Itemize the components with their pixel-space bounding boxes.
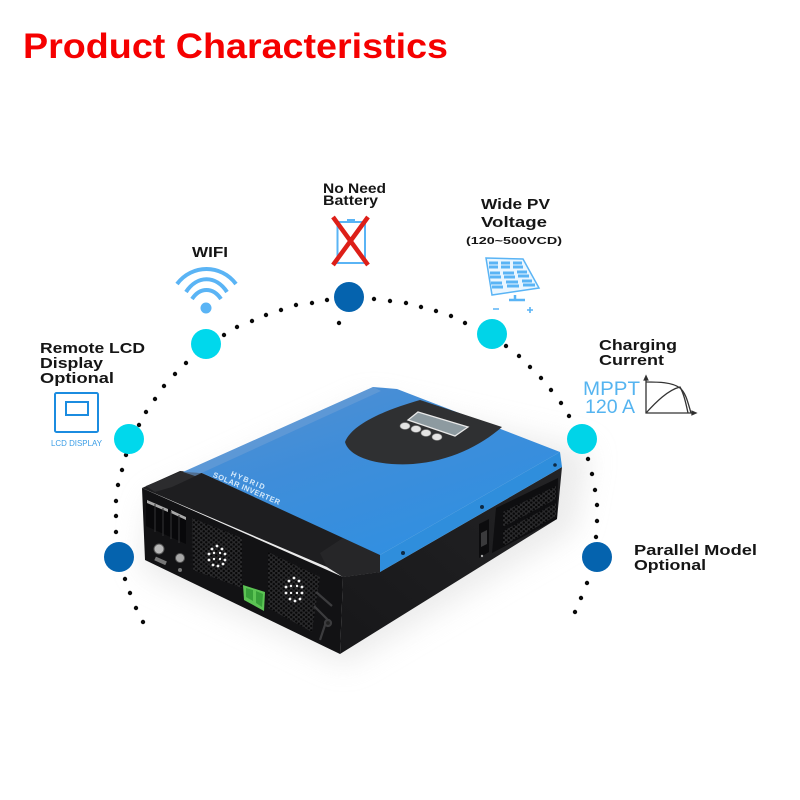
MPPT 120A text [583, 379, 640, 418]
icon: crossed battery [333, 217, 368, 265]
LCD screen [408, 412, 468, 436]
cap chamfer highlight [146, 472, 200, 492]
label: charging current [599, 337, 677, 369]
label: charging current: Charging [599, 337, 677, 354]
node: remote LCD [114, 424, 144, 454]
label: remote LCD [40, 340, 145, 387]
label: remote LCD: Display [40, 355, 104, 372]
right fan grille [268, 552, 320, 632]
MPPT 120A text: MPPT [583, 379, 640, 400]
label: wide PV voltage: Wide PV [481, 196, 550, 213]
node: wifi [191, 329, 221, 359]
right side of case [340, 467, 562, 654]
icon: solar panel [486, 258, 539, 313]
label: remote LCD: Optional [40, 370, 114, 387]
black end cap [142, 471, 380, 577]
icon: LCD display: LCD DISPLAY [51, 438, 102, 448]
blue lid [183, 387, 560, 555]
left fan grille [192, 518, 242, 588]
side vent [492, 478, 558, 553]
brand text: HYBRID [230, 469, 267, 492]
breaker terminals [146, 500, 186, 544]
front face [142, 488, 343, 654]
control panel [345, 400, 502, 464]
output terminals [314, 592, 332, 640]
label: wifi: WIFI [192, 244, 228, 261]
power switch [479, 519, 489, 558]
MPPT 120A text: 120 A [585, 397, 635, 418]
front knobs [154, 544, 184, 572]
label: parallel model: Optional [634, 557, 706, 574]
node: charging current [567, 424, 597, 454]
dotted arc [114, 297, 599, 624]
icon: wifi [177, 269, 236, 314]
panel buttons [400, 423, 442, 440]
soft shadow behind inverter [140, 400, 590, 665]
left fan hub [208, 545, 226, 567]
green connector [243, 585, 265, 611]
lid screws [401, 463, 557, 555]
right fan hub [285, 577, 303, 602]
lid stripe [183, 387, 381, 476]
label: remote LCD: Remote LCD [40, 340, 145, 357]
node: parallel model right [582, 542, 612, 572]
node: parallel model [104, 542, 134, 572]
label: wide PV voltage [466, 196, 562, 247]
icon: LCD display [51, 393, 102, 448]
brand text: SOLAR INVERTER [212, 470, 282, 507]
node: PV voltage [477, 319, 507, 349]
label: parallel model: Parallel Model [634, 542, 757, 559]
label: charging current: Current [599, 352, 664, 369]
label: wide PV voltage: (120~500VCD) [466, 236, 562, 247]
node: no battery [334, 282, 364, 312]
lid front fold [380, 452, 562, 572]
label: no need battery [323, 180, 386, 208]
chart: MPPT curve [644, 376, 696, 415]
title: Product Characteristics [23, 27, 448, 66]
label: parallel model [634, 542, 757, 574]
label: wide PV voltage: Voltage [481, 214, 547, 231]
label: no need battery: No Need [323, 180, 386, 196]
inverter product [142, 387, 562, 654]
label: no need battery: Battery [323, 192, 378, 208]
